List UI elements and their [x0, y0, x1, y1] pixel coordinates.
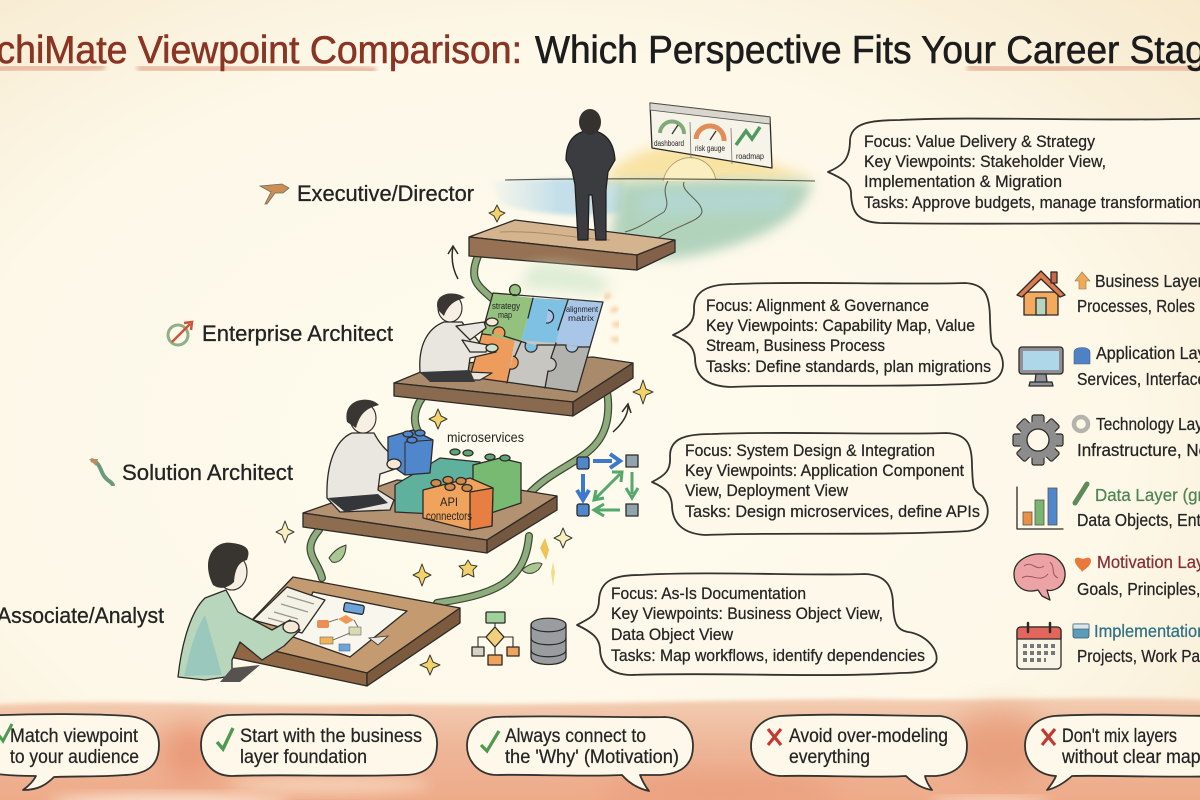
callout: enterprise architect: Focus: Alignment & Governance — [706, 296, 929, 315]
label: Enterprise Architect: Enterprise Architect — [202, 321, 393, 346]
tip: avoid over-modeling — [751, 715, 967, 790]
callout: executive: Implementation & Migration — [864, 172, 1062, 191]
icon: dashboard panel: risk gauge — [695, 144, 725, 153]
tip: do not mix layers — [1025, 715, 1200, 790]
callout: enterprise architect: Key Viewpoints: Capability Map, Value — [706, 316, 975, 335]
illustration: executive platform — [469, 220, 675, 270]
callout: executive: Focus: Value Delivery & Strategy — [864, 132, 1095, 151]
icon: component diagram — [577, 454, 638, 516]
callout: executive: Key Viewpoints: Stakeholder View, — [864, 152, 1106, 171]
tip: match viewpoint: Match viewpoint — [10, 726, 139, 747]
callout: enterprise architect: Stream, Business Process — [706, 336, 885, 355]
arrow: up to executive — [448, 246, 458, 279]
icon: solution role marker — [89, 459, 113, 486]
legend: implementation layer — [1017, 621, 1200, 669]
callout: associate analyst — [577, 573, 937, 675]
illustration: solution architect platform — [303, 480, 557, 553]
legend: technology layer — [1013, 414, 1200, 465]
arrow: up to enterprise — [613, 404, 631, 432]
illustration: building blocks: microservices — [447, 429, 524, 445]
illustration: strategy puzzle: map — [498, 310, 512, 320]
tip: start with business layer: Start with the business — [240, 726, 422, 747]
icon: dashboard panel — [650, 103, 772, 168]
illustration: building blocks: API — [440, 495, 458, 509]
label: Executive/Director: Executive/Director — [297, 181, 474, 206]
illustration: enterprise architect — [420, 294, 498, 382]
tip: start with business layer: layer foundation — [240, 747, 367, 768]
tip: start with business layer — [201, 714, 437, 776]
callout: solution architect: Key Viewpoints: Application Component — [685, 461, 964, 480]
illustration: strategy puzzle: matrix — [568, 313, 595, 323]
callout: solution architect: View, Deployment View — [685, 481, 849, 500]
callout: associate analyst: Focus: As-Is Documentation — [611, 584, 806, 603]
callout: executive — [828, 118, 1200, 224]
tip: always connect to why — [467, 716, 693, 791]
illustration: analyst desk — [230, 577, 460, 686]
icon: enterprise role marker — [168, 322, 192, 345]
icon: dashboard panel: roadmap — [736, 152, 764, 161]
illustration: executive figure — [566, 109, 615, 240]
illustration: solution architect — [327, 400, 433, 512]
illustration: connecting vines — [310, 256, 608, 603]
illustration: strategy puzzle: strategy — [492, 301, 520, 311]
callout: associate analyst: Data Object View — [611, 625, 734, 644]
tip: always connect to why: the 'Why' (Motivation) — [505, 747, 679, 768]
icon: executive role marker — [260, 184, 289, 204]
callout: associate analyst: Tasks: Map workflows, identify dependencies — [611, 646, 925, 665]
panel: bottom tips band — [0, 698, 1200, 800]
tip: always connect to why: Always connect to — [505, 726, 646, 747]
legend: business layer — [1017, 271, 1200, 316]
label: Solution Architect: Solution Architect — [122, 460, 293, 485]
icon group: sparkles and leaves — [276, 205, 653, 675]
tip: match viewpoint — [0, 714, 159, 790]
tip: do not mix layers: Don't mix layers — [1062, 726, 1177, 747]
legend: motivation layer — [1014, 552, 1200, 600]
callout: solution architect: Focus: System Design & Integration — [685, 441, 935, 460]
tip: match viewpoint: to your audience — [10, 747, 139, 768]
callout: solution architect — [652, 433, 988, 535]
label: Associate/Analyst: Associate/Analyst — [0, 603, 164, 628]
tip: avoid over-modeling: Avoid over-modeling — [789, 726, 948, 747]
illustration: landscape with sunrise path — [492, 142, 815, 259]
callout: associate analyst: Key Viewpoints: Business Object View, — [611, 604, 883, 623]
callout: solution architect: Tasks: Design microservices, define APIs — [685, 502, 980, 521]
illustration: analyst figure — [178, 543, 300, 682]
tip: avoid over-modeling: everything — [789, 747, 870, 768]
illustration: enterprise architect platform — [394, 357, 633, 416]
illustration: building blocks — [395, 429, 524, 530]
illustration: strategy puzzle — [470, 263, 617, 392]
title — [0, 29, 1200, 72]
legend: data layer — [1017, 484, 1200, 530]
legend: application layer — [1019, 343, 1200, 389]
illustration: building blocks: connectors — [426, 509, 472, 523]
callout: enterprise architect: Tasks: Define standards, plan migrations — [706, 357, 991, 376]
icon: dashboard panel: dashboard — [654, 139, 684, 148]
icon: flowchart and database — [472, 612, 566, 665]
illustration: strategy puzzle: alignment — [566, 304, 599, 314]
callout: enterprise architect — [673, 283, 1003, 387]
